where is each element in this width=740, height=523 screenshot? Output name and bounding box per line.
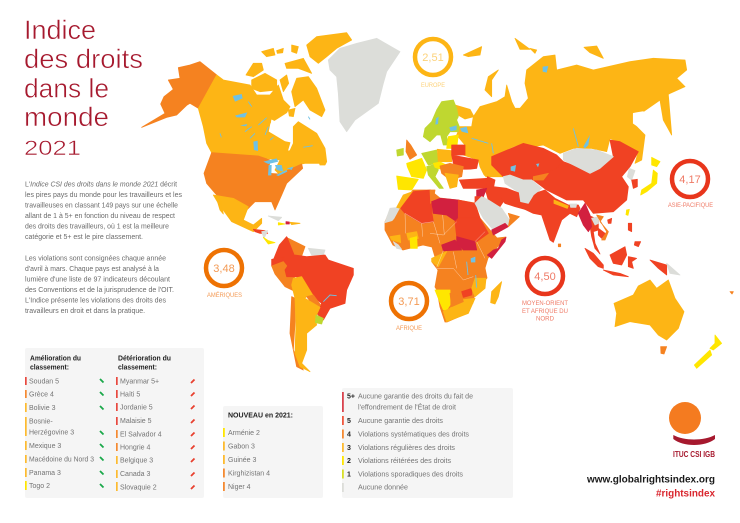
list: améliorations: Macédoine du Nord 3 <box>29 456 94 464</box>
list: détériorations: Jordanie 5 <box>120 404 153 412</box>
ring: Moyen-Orient et Afrique du Nord: ET AFRIQUE DU <box>522 309 568 315</box>
website: www.globalrightsindex.org <box>586 474 715 486</box>
panel: légende: 1 <box>347 472 351 478</box>
panel: nouveau en 2021: Niger 4 <box>228 484 251 491</box>
panel: nouveau en 2021 <box>223 406 323 498</box>
ring: Amériques <box>206 250 242 299</box>
intro text: d'avril à mars. Chaque pays est analysé à la <box>25 266 159 273</box>
ring: Afrique: AFRIQUE <box>396 326 422 332</box>
world map <box>142 33 733 372</box>
list: améliorations: Panama 3 <box>29 470 61 477</box>
ring: Europe: EUROPE <box>421 83 445 89</box>
panel: nouveau en 2021: Arménie 2 <box>228 430 260 437</box>
panel: légende: Violations sporadiques des droits <box>358 472 464 478</box>
intro text: allant de 1 à 5+ en fonction du niveau de respect <box>25 213 175 220</box>
title: monde <box>24 102 109 132</box>
hashtag: #rightsindex <box>656 488 715 500</box>
intro text <box>25 182 182 315</box>
ring: Moyen-Orient et Afrique du Nord <box>522 258 568 322</box>
list: détériorations: Slovaquie 2 <box>120 484 157 492</box>
heading: détérioration: classement: <box>118 364 157 372</box>
ring: Asie-Pacifique <box>668 161 713 209</box>
ring: Amériques: 3,48 <box>213 263 235 275</box>
panel: légende: 5 <box>347 418 351 425</box>
list: détériorations: Canada 3 <box>120 471 150 478</box>
ring: Moyen-Orient et Afrique du Nord: NORD <box>536 316 555 322</box>
heading: amélioration: classement: <box>30 364 69 372</box>
list: améliorations <box>25 377 104 490</box>
heading: détérioration <box>118 356 171 372</box>
intro text: travailleuses en classant 149 pays sur une échelle <box>25 202 178 210</box>
panel: légende: l'effondrement de l'État de droit <box>358 402 456 412</box>
ring: Asie-Pacifique: 4,17 <box>679 174 701 186</box>
intro text: catégorie et 5+ est le pire classement. <box>25 234 143 241</box>
ring: Afrique: 3,71 <box>398 296 420 308</box>
list: détériorations: Hongrie 4 <box>120 444 150 452</box>
ring: Moyen-Orient et Afrique du Nord: MOYEN-ORIENT <box>522 301 568 307</box>
list: améliorations: Grèce 4 <box>29 392 54 398</box>
panel: légende: Violations réitérées des droits <box>358 458 452 465</box>
panel: nouveau en 2021: Kirghizistan 4 <box>228 470 270 478</box>
list: améliorations: Bolivie 3 <box>29 405 56 412</box>
map: Africa <box>385 190 506 322</box>
ring: Europe: 2,51 <box>422 52 444 64</box>
panel: légende: 4 <box>347 432 351 438</box>
logo: ITUC CSI IGB: ITUC CSI IGB <box>673 450 715 459</box>
intro text: des droits des travailleurs, où 1 est la meilleure <box>25 224 169 230</box>
panel: nouveau en 2021: Guinée 3 <box>228 457 257 464</box>
list: détériorations: Haïti 5 <box>120 392 140 398</box>
intro text: L'Indice présente les violations des droits des <box>25 298 166 304</box>
intro text: travailleurs en droit et dans la pratique. <box>25 308 145 315</box>
title: 2021 <box>24 137 81 160</box>
ring: Amériques: AMÉRIQUES <box>207 292 242 299</box>
list: détériorations: Belgique 3 <box>120 458 153 464</box>
list: détériorations <box>116 377 194 492</box>
intro text: les pires pays du monde pour les travailleurs et les <box>25 192 182 199</box>
panel: légende: 5+ <box>347 394 355 400</box>
map: Middle East, South and Southeast Asia, Oceania <box>475 180 733 368</box>
panel: légende <box>342 388 513 498</box>
panel: légende: 2 <box>347 458 351 465</box>
list: détériorations: El Salvador 4 <box>120 432 162 438</box>
panel: amélioration et détérioration <box>25 348 204 498</box>
heading: amélioration <box>30 356 81 372</box>
map: Greenland <box>328 38 400 132</box>
list: détériorations: Myanmar 5+ <box>120 378 159 386</box>
map: North America <box>142 33 352 212</box>
map: Russia <box>455 38 687 177</box>
ring: Afrique <box>391 283 427 332</box>
panel: légende: Aucune garantie des droits <box>358 418 444 425</box>
title: des droits <box>24 44 143 74</box>
list: améliorations: Herzégovine 3 <box>29 430 74 436</box>
panel: nouveau en 2021: Gabon 3 <box>228 444 255 450</box>
logo: ITUC CSI IGB <box>669 402 715 459</box>
ring: Europe <box>415 39 451 89</box>
ring: Moyen-Orient et Afrique du Nord: 4,50 <box>534 271 556 283</box>
list: améliorations: Soudan 5 <box>29 378 59 386</box>
panel: légende: 3 <box>347 445 351 452</box>
intro text: Les violations sont consignées chaque année <box>25 256 166 262</box>
intro text: des Conventions et de la jurisprudence de l'OIT. <box>25 287 174 294</box>
heading: amélioration: Amélioration du <box>30 356 81 362</box>
list: améliorations: Mexique 3 <box>29 443 61 450</box>
panel: légende: Aucune garantie des droits du fait de <box>358 394 473 400</box>
list: détériorations: Malaisie 5 <box>120 418 152 425</box>
ring: Asie-Pacifique: ASIE-PACIFIQUE <box>668 203 713 209</box>
panel: légende: Violations régulières des droits <box>358 445 456 452</box>
panel: nouveau en 2021: NOUVEAU en 2021: <box>228 412 293 420</box>
panel: légende: Aucune donnée <box>358 484 408 492</box>
list: améliorations: Togo 2 <box>29 483 50 490</box>
map: Latin America <box>213 195 353 372</box>
intro text: L'Indice CSI des droits dans le monde 2021 décrit <box>25 182 177 188</box>
title: dans le <box>24 74 109 104</box>
title: Indice <box>24 15 96 45</box>
map: Europe <box>397 100 494 190</box>
intro text: lumière d'une liste de 97 indicateurs découlant <box>25 276 170 284</box>
heading: détérioration: Détérioration du <box>118 356 171 362</box>
title <box>24 15 143 160</box>
panel: légende: Violations systématiques des droits <box>358 432 469 438</box>
list: améliorations: Bosnie- <box>29 418 53 426</box>
map: Asia <box>486 140 660 215</box>
